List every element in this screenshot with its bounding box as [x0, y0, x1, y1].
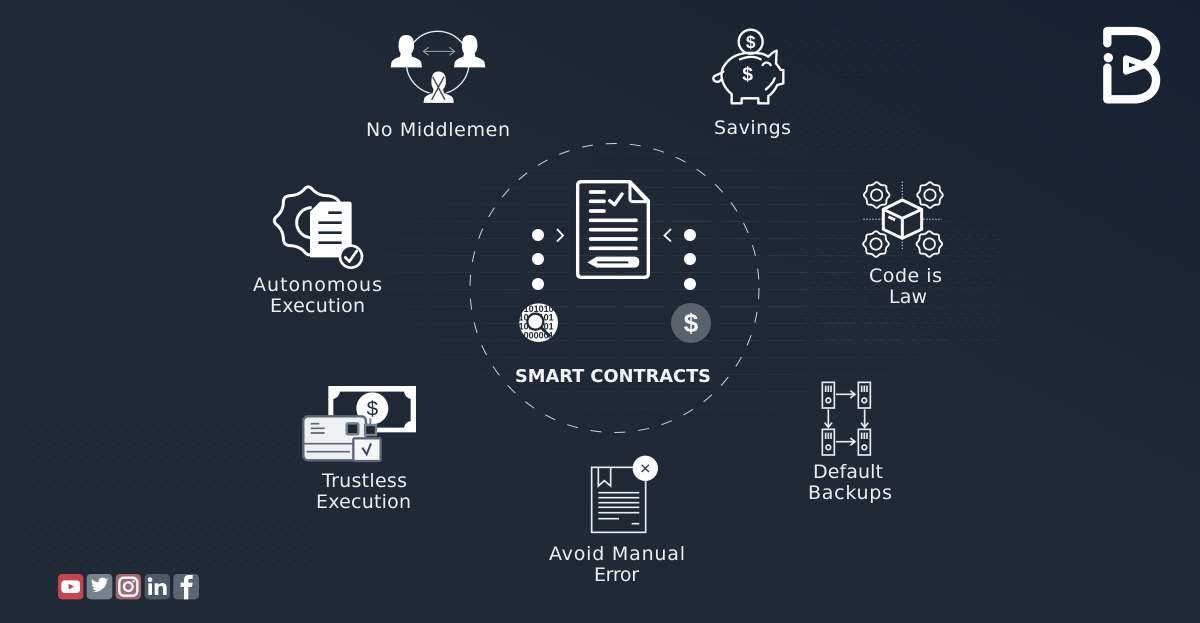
- icon: binary magnifier: 1010101: [519, 313, 554, 323]
- icon: dollar coin: $: [684, 308, 699, 338]
- label: Savings: [714, 117, 791, 139]
- icon: piggy bank: [713, 30, 783, 103]
- panel: default backups: [808, 382, 892, 504]
- logo: [1104, 31, 1156, 99]
- icon: banknote and card: $: [367, 398, 379, 421]
- icon: piggy bank: $: [746, 32, 756, 52]
- label: Trustless: [321, 470, 407, 492]
- heading: SMART CONTRACTS: [515, 366, 711, 387]
- panel: code is law: [863, 182, 943, 308]
- icon: facebook: [173, 574, 199, 599]
- icon: document with x badge: [592, 456, 658, 532]
- panel: code is law: Law: [889, 286, 927, 308]
- icon: twitter: [87, 574, 112, 599]
- label: Autonomous: [253, 274, 382, 296]
- dashed circle: [470, 144, 759, 432]
- label: Avoid Manual: [549, 543, 685, 565]
- label: No Middlemen: [366, 119, 510, 141]
- icon: three people: [391, 31, 485, 103]
- panel: default backups: Backups: [808, 482, 892, 504]
- icon: instagram: [116, 574, 141, 599]
- social icons: [58, 574, 199, 599]
- panel: no middlemen: [366, 31, 510, 141]
- icon: dollar coin: [671, 303, 711, 343]
- icon: binary magnifier: 0101010: [519, 304, 554, 314]
- panel: trustless execution: [303, 386, 416, 513]
- icon: linkedin: [145, 574, 170, 599]
- icon: youtube: [58, 574, 83, 599]
- icon: contract document: [578, 182, 648, 277]
- label: Code is: [869, 265, 942, 287]
- panel: avoid manual error: [549, 456, 685, 586]
- panel: autonomous execution: [253, 187, 382, 317]
- panel: autonomous execution: Execution: [270, 295, 365, 317]
- panel: avoid manual error: Error: [594, 564, 639, 586]
- panel: savings: [713, 30, 791, 139]
- panel: trustless execution: Execution: [316, 491, 411, 513]
- label: Default: [813, 461, 883, 483]
- icon: binary magnifier: 0000001: [519, 331, 554, 341]
- icon: binary magnifier: 1010101: [519, 321, 554, 331]
- icon: cube and gears: [863, 182, 943, 257]
- panel: smart contracts centre: [470, 144, 759, 432]
- icon: piggy bank: $: [742, 65, 753, 86]
- icon: left connector dots: [532, 229, 563, 290]
- icon: gear and document: [274, 187, 362, 268]
- icon: server backup flow: [822, 382, 870, 455]
- icon: binary magnifier: [519, 303, 558, 342]
- icon: right connector dots: [664, 229, 696, 290]
